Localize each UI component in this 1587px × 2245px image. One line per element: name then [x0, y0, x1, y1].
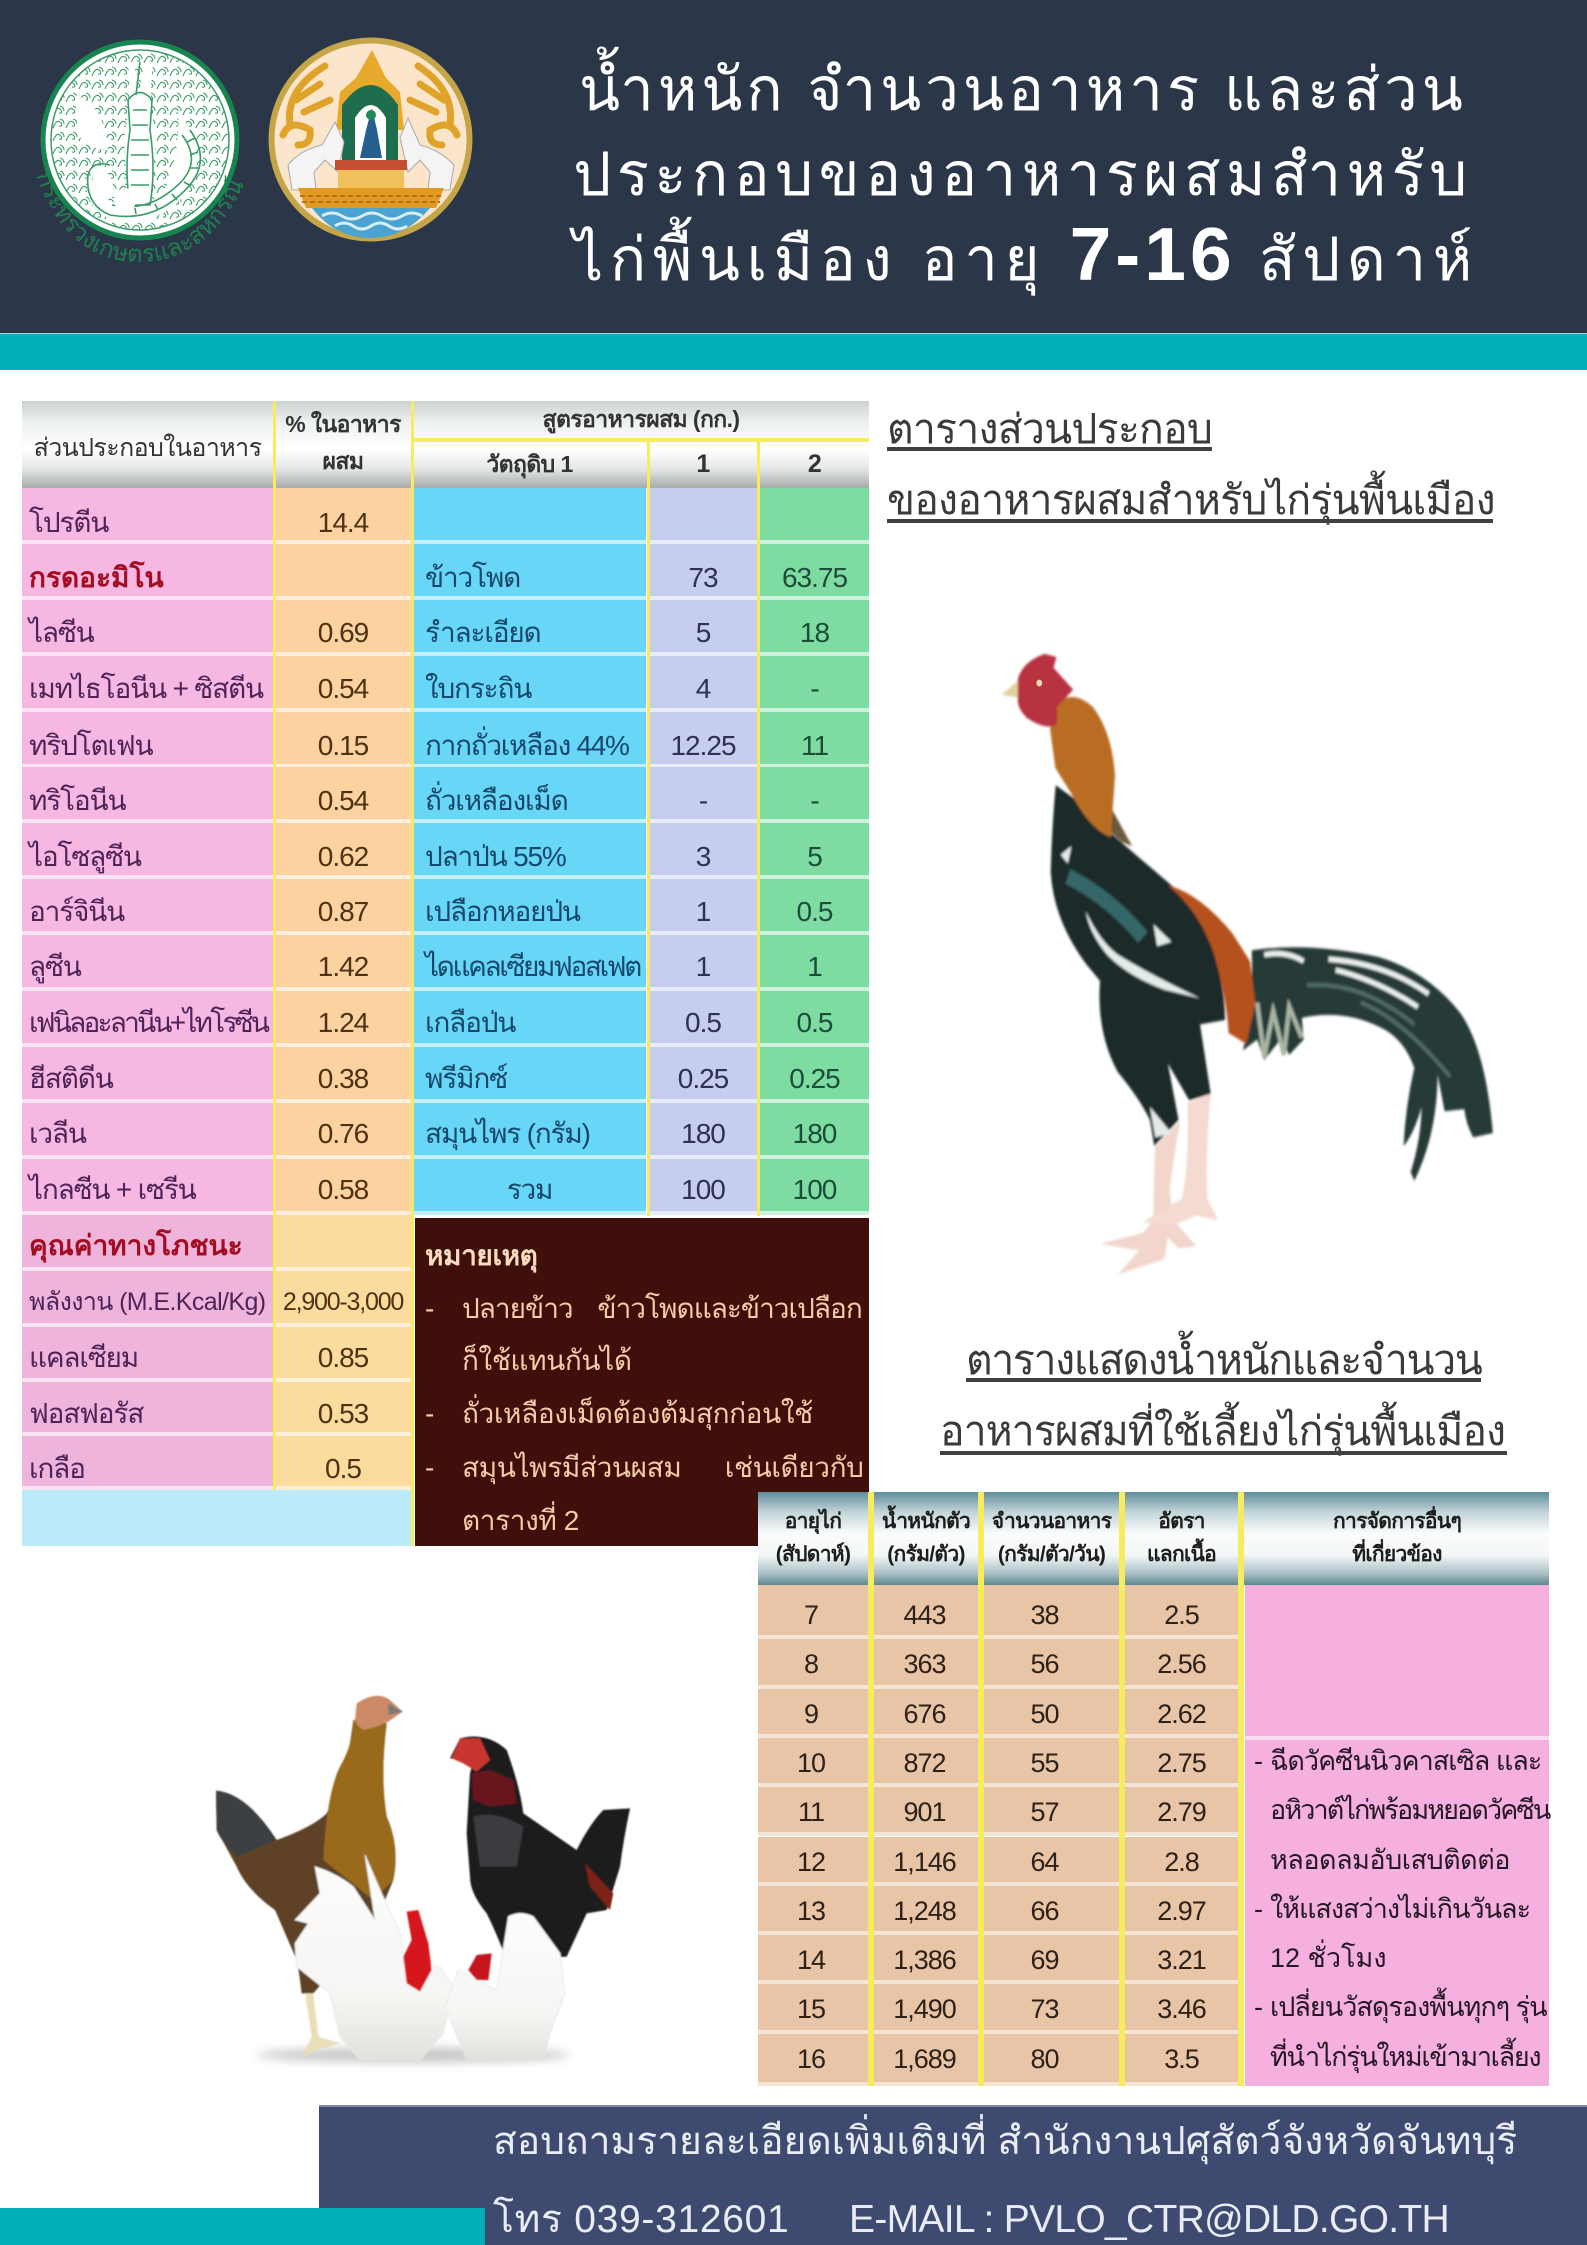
row: week 15: 1,490 — [893, 1994, 956, 2024]
title line 3: ไก่พื้นเมือง อายุ 7-16 สัปดาห์ — [573, 212, 1479, 296]
row: week 12 — [758, 1837, 1510, 1886]
row: isoleucine: 5 — [807, 841, 822, 872]
note 3 continuation: ตารางที่ 2 — [462, 1505, 579, 1536]
row: phenylalanine: 1.24 — [318, 1007, 368, 1038]
row: lysine: 18 — [800, 617, 829, 648]
row: histidine: ฮีสติดีน — [29, 1063, 113, 1094]
row: week 13: 2.97 — [1157, 1896, 1206, 1926]
header: mixed: ผสม — [323, 448, 363, 474]
row: methionine: - — [810, 673, 819, 704]
row: week 13: 13 — [797, 1896, 825, 1926]
row: tryptophan: 11 — [801, 730, 828, 761]
row: isoleucine: 3 — [696, 841, 710, 872]
row: week 12: 2.8 — [1164, 1846, 1199, 1876]
row: valine: เวลีน — [29, 1118, 86, 1149]
row: phosphorus: 0.53 — [318, 1398, 368, 1429]
row: phosphorus: ฟอสฟอรัส — [29, 1398, 143, 1429]
heading line 2: อาหารผสมที่ใช้เลี้ยงไก่รุ่นพื้นเมือง — [940, 1408, 1505, 1454]
row: histidine: พรีมิกซ์ — [425, 1063, 507, 1094]
row: week 11: อหิวาต์ไก่พร้อมหยอดวัคซีน — [1270, 1795, 1549, 1825]
header: conversion rate — [1147, 1510, 1216, 1566]
row: week 10: - — [1254, 1746, 1262, 1776]
row: week 14: 3.21 — [1157, 1945, 1206, 1975]
row: arginine — [22, 879, 869, 935]
row: week 10: 872 — [903, 1748, 946, 1778]
row: histidine — [22, 1047, 869, 1103]
row: tryptophan: ทริปโตเฟน — [29, 730, 152, 761]
row: lysine — [22, 600, 869, 656]
header: body weight — [882, 1505, 970, 1566]
row: lysine: รำละเอียด — [425, 617, 541, 648]
header: management — [1333, 1506, 1461, 1566]
row: methionine: เมทไธโอนีน + ซิสตีน — [29, 673, 263, 704]
row: amino acids: กรดอะมิโน — [29, 562, 164, 593]
image: hens — [214, 1694, 631, 2068]
row: valine: 0.76 — [318, 1118, 368, 1149]
row: week 8: 2.56 — [1157, 1649, 1206, 1679]
row: week 8: 56 — [1030, 1649, 1059, 1679]
note 2: - — [425, 1398, 434, 1429]
row: arginine: 1 — [696, 896, 710, 927]
row: leucine: ลูซีน — [29, 951, 81, 982]
row: week 12: 1,146 — [893, 1846, 956, 1876]
row: phenylalanine: 0.5 — [797, 1007, 832, 1038]
header: feed amount: (กรัม/ตัว/วัน) — [998, 1543, 1105, 1566]
row: glycine: ไกลซีน + เซรีน — [29, 1174, 196, 1205]
header: formula 1: 1 — [696, 450, 710, 478]
header band — [0, 0, 1587, 333]
row: week 15: เปลี่ยนวัสดุรองพื้นทุกๆ รุ่น — [1270, 1992, 1547, 2022]
phone: โทร 039-312601 — [493, 2198, 789, 2241]
footer band — [319, 2105, 1587, 2245]
row: week 13: ให้แสงสว่างไม่เกินวันละ — [1270, 1894, 1530, 1924]
header: formula: สูตรอาหารผสม (กก.) — [543, 406, 739, 432]
panel: weight and feed table — [758, 1492, 1551, 2086]
row: glycine: 100 — [793, 1174, 836, 1205]
row: week 9 — [758, 1689, 1238, 1738]
row: week 12: 64 — [1030, 1846, 1059, 1876]
row: threonine — [22, 767, 869, 823]
row: histidine: 0.25 — [789, 1063, 840, 1094]
row: week 13: 66 — [1030, 1896, 1059, 1926]
row: histidine: 0.38 — [318, 1063, 368, 1094]
row: week 9: 676 — [903, 1699, 946, 1729]
row: week 13: 1,248 — [893, 1896, 956, 1926]
row: amino acids: ข้าวโพด — [425, 562, 520, 593]
row: glycine — [22, 1159, 869, 1215]
row: lysine: ไลซีน — [29, 617, 94, 648]
icon: livestock department emblem — [268, 38, 472, 242]
row: threonine: ทริโอนีน — [29, 785, 125, 816]
note 1 text: ปลายข้าว ข้าวโพดและข้าวเปลือก — [462, 1293, 862, 1324]
row: lysine: 5 — [696, 617, 710, 648]
row: valine — [22, 1103, 869, 1159]
row: tryptophan: 12.25 — [670, 730, 736, 761]
row: week 9: 9 — [804, 1699, 818, 1729]
row: arginine: เปลือกหอยป่น — [425, 896, 580, 927]
header: age: อายุไก่ — [785, 1510, 841, 1533]
row: calcium: 0.85 — [318, 1342, 368, 1373]
row: week 14: 1,386 — [893, 1945, 956, 1975]
row: methionine: 0.54 — [318, 673, 368, 704]
row: week 7: 2.5 — [1164, 1600, 1199, 1630]
row: week 12: 12 — [797, 1846, 825, 1876]
row: week 16 — [758, 2034, 1549, 2086]
title — [569, 46, 1479, 296]
row: arginine: 0.5 — [797, 896, 832, 927]
row: week 14: 69 — [1030, 1945, 1059, 1975]
row: week 7 — [758, 1590, 1238, 1639]
row: week 12: หลอดลมอับเสบติดต่อ — [1270, 1844, 1510, 1874]
row: amino acids: 63.75 — [782, 562, 847, 593]
note 1 continuation: ก็ใช้แทนกันได้ — [462, 1345, 632, 1376]
row: week 15: - — [1254, 1992, 1262, 2022]
row: leucine: 1.42 — [318, 951, 368, 982]
row: isoleucine: 0.62 — [318, 841, 368, 872]
note 1: - — [425, 1293, 434, 1324]
row: isoleucine: ปลาป่น 55% — [425, 841, 566, 872]
row: week 10: ฉีดวัคซีนนิวคาสเซิล และ — [1270, 1746, 1541, 1776]
row: leucine: 1 — [696, 951, 710, 982]
row: threonine: 0.54 — [318, 785, 368, 816]
header: feed amount — [992, 1510, 1112, 1566]
row: energy: 2,900-3,000 — [283, 1288, 403, 1316]
row: methionine — [22, 656, 869, 712]
row: week 13: - — [1254, 1894, 1262, 1924]
footer teal accent — [0, 2208, 485, 2245]
header: percent: % ในอาหาร — [285, 411, 401, 437]
row: phenylalanine: เกลือป่น — [425, 1007, 515, 1038]
panel: composition table — [22, 401, 869, 1546]
row: threonine: - — [699, 785, 707, 816]
blue filler cell — [22, 1490, 413, 1546]
table header — [758, 1492, 1549, 1585]
note heading: หมายเหตุ — [425, 1240, 537, 1271]
row: week 16: 1,689 — [893, 2044, 956, 2074]
row: arginine: 0.87 — [318, 896, 368, 927]
row: threonine: ถั่วเหลืองเม็ด — [425, 785, 568, 816]
heading line 1: ตารางส่วนประกอบ — [887, 406, 1212, 452]
heading: weight table — [940, 1330, 1507, 1456]
row: leucine — [22, 935, 869, 991]
row: week 9: 50 — [1030, 1699, 1059, 1729]
row: week 11: 11 — [798, 1797, 824, 1827]
row: methionine: 4 — [696, 673, 710, 704]
icon: ministry emblem: กระทรวงเกษตรและสหกรณ์ — [36, 173, 244, 262]
row: phosphorus — [22, 1382, 411, 1436]
row: week 11: 57 — [1030, 1797, 1059, 1827]
header: formula 2: 2 — [808, 450, 821, 478]
row: tryptophan: กากถั่วเหลือง 44% — [425, 730, 629, 761]
row: week 7: 38 — [1030, 1600, 1059, 1630]
row: week 10 — [758, 1738, 1541, 1787]
row: energy — [22, 1271, 411, 1327]
header: body weight: (กรัม/ตัว) — [887, 1543, 965, 1566]
row: calcium — [22, 1327, 411, 1382]
row: week 7: 443 — [903, 1600, 946, 1630]
header: feed amount: จำนวนอาหาร — [992, 1510, 1111, 1533]
title line 2: ประกอบของอาหารผสมสำหรับ — [573, 141, 1473, 208]
note 3 text: สมุนไพรมีส่วนผสม เช่นเดียวกับ — [462, 1452, 864, 1483]
image: rooster — [1002, 652, 1494, 1274]
note 3: - — [425, 1452, 434, 1483]
row: salt — [22, 1436, 411, 1490]
row: glycine: รวม — [507, 1174, 552, 1205]
row: week 14: 14 — [797, 1945, 825, 1975]
header: management: ที่เกี่ยวข้อง — [1352, 1543, 1442, 1566]
row: week 10: 10 — [797, 1748, 825, 1778]
heading line 1: ตารางแสดงน้ำหนักและจำนวน — [966, 1337, 1481, 1383]
row: week 8: 363 — [903, 1649, 946, 1679]
header: management: การจัดการอื่นๆ — [1333, 1510, 1461, 1533]
row: week 16: 80 — [1030, 2044, 1059, 2074]
header: raw material: วัตถุดิบ 1 — [486, 451, 573, 477]
row: salt: 0.5 — [325, 1453, 361, 1484]
row: phenylalanine: 0.5 — [685, 1007, 721, 1038]
header: conversion rate: อัตรา — [1158, 1510, 1205, 1533]
icon: ministry emblem — [36, 40, 244, 262]
row: lysine: 0.69 — [318, 617, 368, 648]
table header — [22, 401, 869, 488]
header: age — [776, 1508, 850, 1566]
row: week 15 — [758, 1984, 1549, 2034]
row: nutrition heading: คุณค่าทางโภชนะ — [29, 1230, 243, 1261]
row: isoleucine: ไอโซลูซีน — [29, 841, 141, 872]
pink management column — [1245, 1585, 1549, 2086]
row: valine: 180 — [793, 1118, 836, 1149]
row: methionine: ใบกระถิน — [425, 673, 531, 704]
email: E-MAIL : PVLO_CTR@DLD.GO.TH — [849, 2198, 1449, 2241]
row: arginine: อาร์จินีน — [29, 896, 124, 927]
row: week 7: 7 — [804, 1600, 818, 1630]
row: leucine: ไดแคลเซียมฟอสเฟต — [425, 951, 640, 982]
tan row band fill — [758, 1585, 1240, 1590]
row: week 8 — [758, 1639, 1238, 1689]
row: week 15: 73 — [1030, 1994, 1059, 2024]
footer phone and email — [493, 2190, 1453, 2245]
header: conversion rate: แลกเนื้อ — [1147, 1543, 1216, 1566]
row: week 16: 3.5 — [1164, 2044, 1199, 2074]
row: week 16: 16 — [797, 2044, 825, 2074]
row: tryptophan — [22, 712, 869, 767]
row: week 11 — [758, 1787, 1551, 1836]
teal stripe — [0, 333, 1587, 370]
row: week 11: 2.79 — [1157, 1797, 1206, 1827]
row: histidine: 0.25 — [678, 1063, 728, 1094]
note 2 text: ถั่วเหลืองเม็ดต้องต้มสุกก่อนใช้ — [462, 1398, 813, 1429]
row: valine: 180 — [681, 1118, 725, 1149]
row: week 10: 55 — [1030, 1748, 1059, 1778]
row: week 15: 3.46 — [1157, 1994, 1206, 2024]
footer contact line: สอบถามรายละเอียดเพิ่มเติมที่ สำนักงานปศุสัตว์จังหวัดจันทบุรี — [493, 2120, 1517, 2163]
row: calcium: แคลเซียม — [29, 1342, 138, 1373]
row: phenylalanine — [22, 991, 869, 1047]
row: energy: พลังงาน (M.E.Kcal/Kg) — [29, 1288, 266, 1316]
row: week 13 — [758, 1886, 1530, 1935]
row: week 14: 12 ชั่วโมง — [1270, 1943, 1387, 1973]
row: protein: 14.4 — [318, 507, 368, 538]
row: week 8: 8 — [804, 1649, 818, 1679]
row: glycine: 0.58 — [318, 1174, 368, 1205]
row: threonine: - — [810, 785, 819, 816]
row: nutrition heading — [22, 1215, 411, 1271]
title line 1: น้ำหนัก จำนวนอาหาร และส่วน — [579, 56, 1467, 123]
row: amino acids: 73 — [688, 562, 718, 593]
row: week 14 — [758, 1935, 1549, 1984]
header: body weight: น้ำหนักตัว — [882, 1510, 970, 1533]
row: amino acids — [22, 544, 869, 600]
row: protein: โปรตีน — [29, 507, 108, 538]
notes box — [415, 1218, 869, 1546]
row: week 10: 2.75 — [1157, 1748, 1206, 1778]
row: salt: เกลือ — [29, 1453, 85, 1484]
row: week 9: 2.62 — [1157, 1699, 1206, 1729]
row: phenylalanine: เฟนิลอะลานีน+ไทโรซีน — [29, 1007, 267, 1038]
header: ingredient: ส่วนประกอบในอาหาร — [34, 434, 261, 462]
row: valine: สมุนไพร (กรัม) — [425, 1118, 590, 1149]
row: isoleucine — [22, 823, 869, 879]
row: week 15: 15 — [797, 1994, 825, 2024]
row: week 11: 901 — [903, 1797, 946, 1827]
row: week 16: ที่นำไก่รุ่นใหม่เข้ามาเลี้ยง — [1270, 2042, 1540, 2072]
row: glycine: 100 — [681, 1174, 725, 1205]
row: protein — [22, 488, 869, 544]
heading line 2: ของอาหารผสมสำหรับไก่รุ่นพื้นเมือง — [887, 477, 1495, 523]
row: leucine: 1 — [807, 951, 822, 982]
heading: composition table — [887, 406, 1495, 525]
header: age: (สัปดาห์) — [776, 1543, 850, 1566]
row: tryptophan: 0.15 — [318, 730, 368, 761]
